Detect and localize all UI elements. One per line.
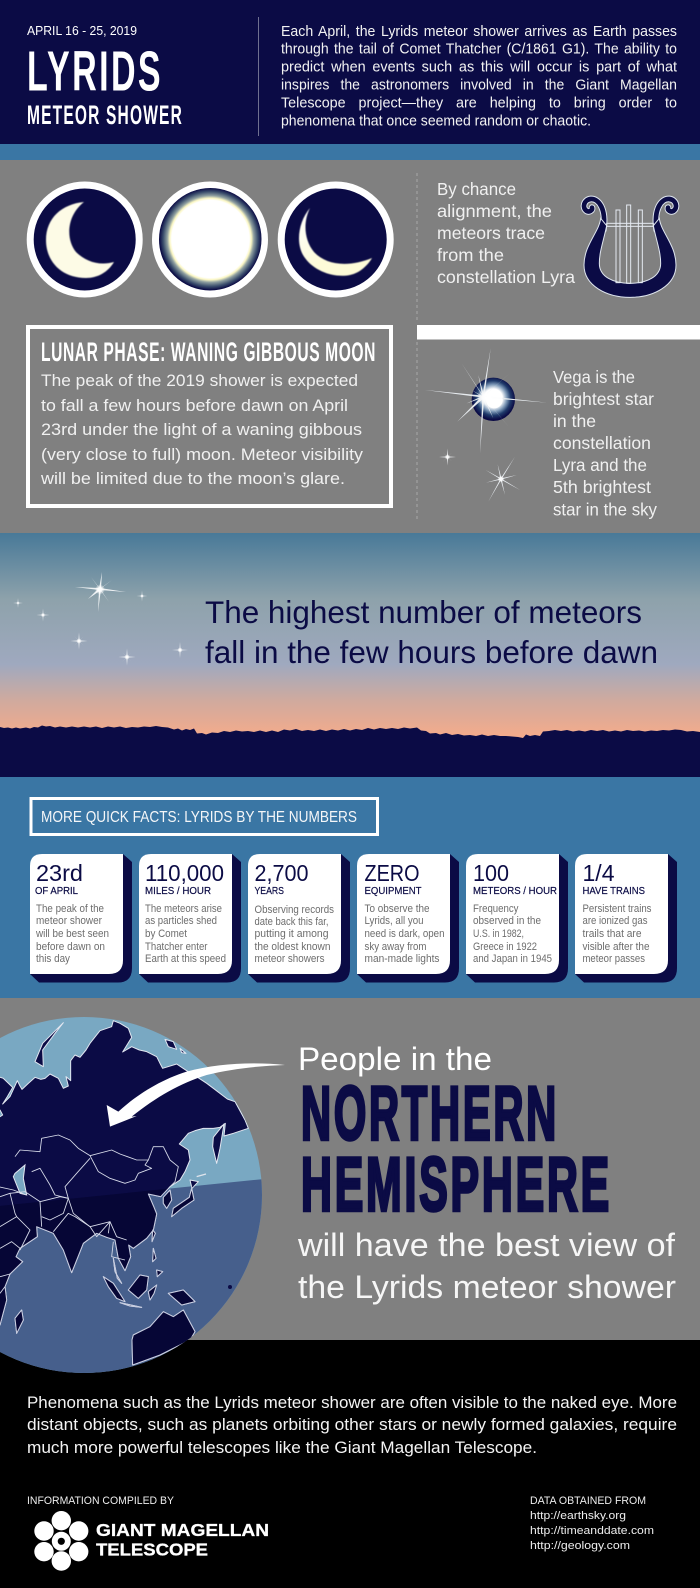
card: 2,700: putting it among xyxy=(254,928,328,940)
closing paragraph xyxy=(27,1393,677,1457)
card: 110,000: 110,000 xyxy=(145,860,224,886)
body: will be limited due to the moon’s glare. xyxy=(40,470,345,488)
hemisphere statement: will have the best view of xyxy=(297,1227,675,1263)
body: The peak of the 2019 shower is expected xyxy=(41,372,358,390)
panel: hemisphere background xyxy=(0,998,700,1340)
card: 110,000: Earth at this speed xyxy=(145,953,226,965)
sky statement: The highest number of meteors xyxy=(205,594,642,630)
arrow xyxy=(107,1063,285,1127)
card: 1/4: trails that are xyxy=(582,928,642,940)
moon: thin crescent xyxy=(281,185,390,294)
body: to fall a few hours before dawn on April xyxy=(41,397,348,415)
text: Vega: Vega is the xyxy=(553,367,635,387)
divider dashes xyxy=(416,173,418,522)
intro paragraph: inspires the astronomers involved in the Giant Magellan xyxy=(281,78,677,94)
intro paragraph: Telescope project—they are helping to bring order to xyxy=(281,96,677,112)
card: 110,000: by Comet xyxy=(145,928,187,940)
card: 2,700: Observing records xyxy=(254,904,334,916)
card: ZERO: ZERO xyxy=(364,860,420,886)
card: ZERO: need is dark, open xyxy=(364,928,444,940)
card: 2,700 xyxy=(248,854,350,982)
logo: Giant Magellan Telescope: TELESCOPE xyxy=(96,1540,208,1560)
text: constellation Lyra: By chance xyxy=(437,179,516,199)
data sources: DATA OBTAINED FROM xyxy=(530,1495,646,1507)
card: 2,700: 2,700 xyxy=(254,860,308,886)
card: 100: observed in the xyxy=(473,915,541,927)
card: 100: METEORS / HOUR xyxy=(473,885,557,897)
body xyxy=(40,372,364,488)
quick facts heading: MORE QUICK FACTS: LYRIDS BY THE NUMBERS xyxy=(41,809,357,826)
card: 1/4: 1/4 xyxy=(582,860,614,886)
intro paragraph xyxy=(281,24,677,130)
card: ZERO: To observe the xyxy=(364,903,430,915)
text: constellation Lyra xyxy=(437,179,575,287)
card: 1/4: meteor passes xyxy=(582,953,645,965)
card: ZERO: EQUIPMENT xyxy=(364,885,422,897)
header band xyxy=(0,0,700,533)
text: constellation Lyra: constellation Lyra xyxy=(437,267,575,287)
data sources xyxy=(530,1495,654,1552)
text: Vega: star in the sky xyxy=(553,500,657,520)
logo: Giant Magellan Telescope: GIANT MAGELLAN xyxy=(96,1520,269,1540)
panel: dawn sky xyxy=(0,533,700,778)
sky statement xyxy=(205,594,658,670)
card: 2,700: the oldest known xyxy=(254,941,330,953)
subtitle: METEOR SHOWER xyxy=(27,100,183,130)
card: ZERO: Lyrids, all you xyxy=(364,915,424,927)
closing paragraph: much more powerful telescopes like the Giant Magellan Telescope. xyxy=(27,1438,537,1457)
intro paragraph: phenomena that once seemed random or chaotic. xyxy=(281,114,591,130)
card: 23rd: OF APRIL xyxy=(35,885,78,897)
hemisphere statement: the Lyrids meteor shower xyxy=(298,1269,676,1305)
icon: Vega star xyxy=(425,348,547,453)
date: APRIL 16 - 25, 2019 xyxy=(27,24,137,38)
card: 23rd: will be best seen xyxy=(35,928,109,940)
body: (very close to full) moon. Meteor visibility xyxy=(41,446,364,464)
hemisphere statement xyxy=(297,1041,676,1305)
panel: quick facts xyxy=(0,777,700,998)
intro paragraph: Each April, the Lyrids meteor shower arrives as Earth passes xyxy=(281,24,677,40)
card: 2,700: meteor showers xyxy=(254,953,325,965)
card: 23rd: meteor shower xyxy=(36,915,102,927)
data sources: http://geology.com xyxy=(530,1540,630,1552)
logo: Giant Magellan Telescope xyxy=(34,1511,269,1571)
closing paragraph: distant objects, such as planets orbiting other stars or newly formed galaxies, require xyxy=(27,1415,677,1434)
emphasised words xyxy=(301,1071,612,1227)
text: Vega: in the xyxy=(553,411,596,431)
sky statement: fall in the few hours before dawn xyxy=(205,634,658,670)
card: 100: Frequency xyxy=(473,903,519,915)
text: Vega xyxy=(553,367,657,520)
intro paragraph: through the tail of Comet Thatcher (C/1861 G1). The ability to xyxy=(281,42,677,58)
text: constellation Lyra: alignment, the xyxy=(437,201,552,221)
card: 23rd: this day xyxy=(36,953,70,965)
card: 100 xyxy=(466,854,568,982)
body: 23rd under the light of a waning gibbous xyxy=(41,421,362,439)
card: 1/4: are ionized gas xyxy=(582,915,648,927)
icon: lyre xyxy=(584,199,676,297)
data sources: http://timeanddate.com xyxy=(530,1525,654,1537)
quick facts heading xyxy=(31,798,378,834)
icon: medium star xyxy=(486,457,520,502)
card: 1/4: Persistent trains xyxy=(582,903,652,915)
stars xyxy=(13,572,188,666)
card: 1/4: visible after the xyxy=(582,941,650,953)
card: 110,000 xyxy=(139,854,241,982)
Caspian sea xyxy=(13,1165,27,1195)
text: constellation Lyra: from the xyxy=(437,245,504,265)
card: 23rd: 23rd xyxy=(36,860,83,886)
card: 110,000: Thatcher enter xyxy=(145,941,208,953)
closing paragraph: Phenomena such as the Lyrids meteor shower are often visible to the naked eye. More xyxy=(27,1393,677,1412)
card: 23rd: before dawn on xyxy=(36,941,105,953)
main title: LYRIDS xyxy=(27,40,163,104)
text: Vega: Lyra and the xyxy=(553,455,647,475)
card: ZERO: man-made lights xyxy=(364,953,440,965)
moon: waxing crescent xyxy=(30,185,139,294)
intro paragraph: predict when events such as this will occur is part of what xyxy=(281,60,677,76)
panel: lunar phase xyxy=(28,327,391,506)
card: 100: and Japan in 1945 xyxy=(473,953,552,965)
card: 23rd xyxy=(30,854,132,982)
card: 2,700: date back this far, xyxy=(254,916,328,928)
card: 100: 100 xyxy=(473,860,509,886)
card: 100: Greece in 1922 xyxy=(473,941,537,953)
hemisphere statement: People in the xyxy=(298,1041,492,1077)
title block xyxy=(27,24,183,130)
card: ZERO xyxy=(357,854,459,982)
card: 1/4: HAVE TRAINS xyxy=(582,885,645,897)
icon: small star xyxy=(439,448,456,466)
text: constellation Lyra: meteors trace xyxy=(437,223,545,243)
card: 110,000: MILES / HOUR xyxy=(145,885,211,897)
card: ZERO: sky away from xyxy=(364,941,426,953)
text: Vega: brightest star xyxy=(553,389,654,409)
card: 110,000: The meteors arise xyxy=(145,903,222,915)
credit label: INFORMATION COMPILED BY xyxy=(27,1495,175,1507)
card: 2,700: YEARS xyxy=(254,885,284,897)
card: 23rd: The peak of the xyxy=(36,903,104,915)
white bar xyxy=(417,325,700,340)
globe map xyxy=(0,1017,262,1373)
card: 1/4 xyxy=(575,854,677,982)
data sources: http://earthsky.org xyxy=(530,1510,626,1522)
card: 110,000: as particles shed xyxy=(145,915,217,927)
heading: LUNAR PHASE: WANING GIBBOUS MOON xyxy=(41,337,376,367)
panel: footer background xyxy=(0,1340,700,1588)
text: Vega: 5th brightest xyxy=(553,477,651,497)
horizon silhouette xyxy=(0,726,700,778)
text: Vega: constellation xyxy=(553,433,651,453)
card: 100: U.S. in 1982, xyxy=(473,928,524,940)
moon: full xyxy=(156,185,264,294)
